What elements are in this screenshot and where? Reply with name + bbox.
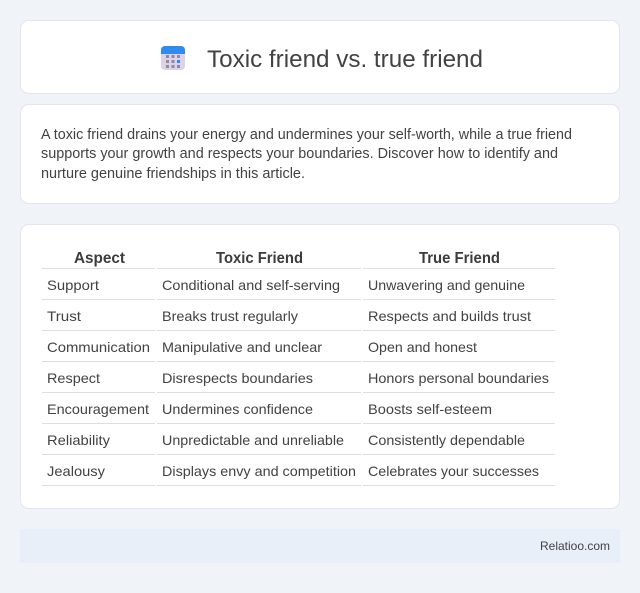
row: jealousy: Displays envy and competition bbox=[162, 463, 356, 479]
row: trust: Breaks trust regularly bbox=[162, 308, 298, 324]
row: support: Conditional and self-serving bbox=[162, 277, 340, 293]
row: communication bbox=[47, 339, 477, 355]
intro text bbox=[41, 127, 572, 182]
row: respect: Respect bbox=[47, 370, 100, 386]
row: respect bbox=[47, 370, 549, 386]
row: communication: Manipulative and unclear bbox=[162, 339, 322, 355]
intro text: supports your growth and respects your boundaries. Discover how to identify and bbox=[41, 146, 558, 162]
row: reliability: Reliability bbox=[47, 432, 110, 448]
row: reliability bbox=[47, 432, 525, 448]
row: respect: Honors personal boundaries bbox=[368, 370, 549, 386]
icon: calendar bbox=[161, 46, 185, 70]
row: encouragement: Undermines confidence bbox=[162, 401, 313, 417]
title: Toxic friend vs. true friend bbox=[207, 46, 483, 73]
row: support: Support bbox=[47, 277, 99, 293]
row: respect: Disrespects boundaries bbox=[162, 370, 313, 386]
row: encouragement: Encouragement bbox=[47, 401, 149, 417]
row: jealousy: Celebrates your successes bbox=[368, 463, 539, 479]
row: jealousy: Jealousy bbox=[47, 463, 105, 479]
panel: comparison table bbox=[20, 224, 620, 508]
row: jealousy bbox=[47, 463, 539, 479]
table header bbox=[74, 250, 500, 267]
table row lines bbox=[42, 268, 555, 486]
panel: introduction bbox=[20, 104, 620, 204]
panel: title card bbox=[20, 20, 620, 94]
table header: Toxic Friend bbox=[216, 250, 303, 267]
row: communication: Open and honest bbox=[368, 339, 477, 355]
intro text: A toxic friend drains your energy and undermines your self-worth, while a true friend bbox=[41, 127, 572, 143]
table header: True Friend bbox=[419, 250, 500, 267]
row: support: Unwavering and genuine bbox=[368, 277, 525, 293]
row: reliability: Consistently dependable bbox=[368, 432, 525, 448]
row: trust: Trust bbox=[47, 308, 81, 324]
row: trust bbox=[47, 308, 531, 324]
row: encouragement: Boosts self-esteem bbox=[368, 401, 492, 417]
intro text: nurture genuine friendships in this article. bbox=[41, 166, 305, 182]
row: reliability: Unpredictable and unreliable bbox=[162, 432, 344, 448]
row: trust: Respects and builds trust bbox=[368, 308, 531, 324]
footer bbox=[20, 529, 620, 563]
row: communication: Communication bbox=[47, 339, 150, 355]
footer credit: Relatioo.com bbox=[540, 539, 610, 553]
row: encouragement bbox=[47, 401, 492, 417]
row: support bbox=[47, 277, 525, 293]
table header: Aspect bbox=[74, 250, 126, 267]
